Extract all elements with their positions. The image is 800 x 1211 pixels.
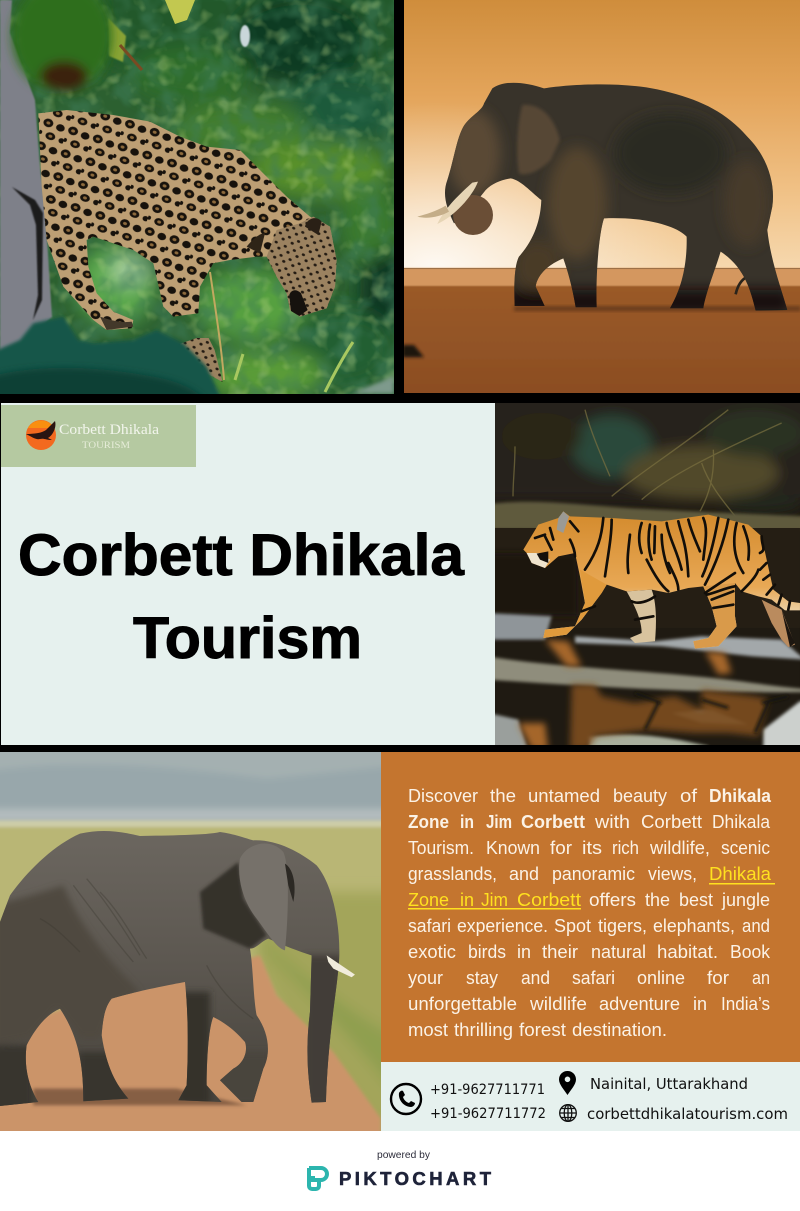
trunk disc: [453, 195, 493, 235]
description text: wildlife,: [649, 838, 710, 858]
grass background: [495, 403, 800, 510]
description text: stay: [466, 968, 498, 988]
rear leg colour: [693, 583, 737, 649]
description text: for: [550, 838, 572, 858]
description text: and: [742, 916, 770, 936]
elephant ear: [517, 105, 560, 174]
pale water reflections: [488, 613, 800, 753]
description text: Corbett: [521, 812, 585, 832]
description text: best: [679, 890, 713, 910]
logo badge: [1, 405, 196, 467]
description text: the: [490, 786, 516, 806]
leopard head: [267, 217, 337, 317]
photo: elephant on dirt road: [0, 752, 381, 1131]
description text: adventure: [599, 994, 680, 1014]
elephant ear: [239, 844, 288, 950]
hidden cub: [177, 338, 223, 382]
tiger reflection: [518, 640, 768, 750]
description text: and: [509, 864, 539, 884]
description text: unforgettable: [408, 994, 517, 1014]
landscape: [0, 762, 381, 810]
link text: Dhikala: [709, 864, 772, 884]
leopard body: [38, 110, 337, 382]
description text: beauty: [613, 786, 667, 806]
description text: Jim: [486, 812, 512, 832]
elephant silhouette: [437, 77, 791, 313]
leaves: [165, 0, 195, 24]
panel: title: [1, 403, 495, 745]
bank: [485, 502, 800, 531]
shadow line: [514, 306, 800, 311]
description text: forest: [519, 1020, 566, 1040]
description text: Zone: [408, 812, 449, 832]
description text: natural: [591, 942, 646, 962]
description text: offers: [589, 890, 636, 910]
link text: Jim: [481, 890, 508, 910]
description text: experience.: [457, 916, 548, 936]
description text: grasslands,: [408, 864, 497, 884]
description text: in: [460, 812, 474, 832]
phone numbers: [430, 1082, 546, 1122]
icon: piktochart logo: [309, 1168, 327, 1189]
description text: jungle: [721, 890, 770, 910]
icon: location pin: [559, 1071, 576, 1095]
description text: its: [582, 838, 602, 858]
location text: Nainital, Uttarakhand: [590, 1075, 748, 1093]
description text: their: [542, 942, 578, 962]
dark water: [495, 528, 800, 532]
description text: tigers,: [598, 916, 647, 936]
photo: tiger: [495, 403, 800, 745]
photo: leopard: [0, 0, 420, 410]
foreground bush: [0, 316, 221, 394]
description text: most: [408, 1020, 448, 1040]
link text: [408, 864, 775, 910]
description text: online: [637, 968, 685, 988]
tusks: [437, 182, 478, 224]
tail: [736, 277, 747, 294]
website text: corbettdhikalatourism.com: [587, 1105, 788, 1123]
tusk: [327, 955, 355, 977]
piktochart wordmark: PIKTOCHART: [339, 1168, 492, 1189]
description text: views,: [648, 864, 697, 884]
wrinkles: [40, 879, 253, 1019]
dirt road: [0, 955, 381, 1145]
tiger stripes: [535, 518, 790, 620]
description text: India’s: [721, 994, 770, 1014]
description text: [408, 786, 775, 1040]
description text: scenic: [721, 838, 770, 858]
description text: untamed: [528, 786, 600, 806]
description text: in: [517, 942, 531, 962]
small dark object: [402, 345, 424, 357]
icon: eagle: [26, 421, 55, 440]
description text: safari: [572, 968, 615, 988]
shoulder shade: [200, 862, 267, 949]
far legs: [762, 600, 795, 647]
description text: the: [645, 890, 670, 910]
foliage mottling: [0, 0, 394, 394]
heading: Corbett Dhikala: [18, 523, 465, 588]
blurred foreground leaf blob: [12, 0, 112, 92]
phone numbers: +91-9627711772: [430, 1106, 546, 1122]
heading: Tourism: [133, 606, 362, 671]
description text: exotic: [408, 942, 456, 962]
description text: birds: [468, 942, 506, 962]
description text: elephants,: [653, 916, 735, 936]
description text: habitat.: [657, 942, 718, 962]
tiger body: [523, 511, 800, 649]
description text: an: [752, 968, 770, 988]
description text: in: [693, 994, 707, 1014]
link text: Corbett: [517, 890, 581, 910]
description text: thrilling: [454, 1020, 513, 1040]
tail: [1, 909, 9, 989]
elephant shading: [0, 885, 342, 1112]
description text: and: [521, 968, 550, 988]
description text: Tourism.: [408, 838, 474, 858]
elephant body: [0, 825, 347, 1112]
footer: powered by Piktochart: [0, 1131, 800, 1211]
description text: Spot: [554, 916, 591, 936]
elephant shading: [447, 110, 791, 313]
link text: in: [460, 890, 474, 910]
icon: sun: [26, 420, 56, 450]
powered by: powered by: [377, 1149, 431, 1161]
description text: destination.: [572, 1020, 667, 1040]
description text: panoramic: [552, 864, 635, 884]
icon: phone: [391, 1084, 421, 1114]
description text: with: [594, 812, 630, 832]
elephant shadow: [33, 1089, 247, 1105]
description text: your: [408, 968, 443, 988]
tree trunk: [0, 0, 52, 353]
panel: description: [381, 752, 800, 1062]
tiger face: [527, 553, 550, 568]
grass strokes: [513, 410, 782, 518]
photo: elephant at sunset: [394, 0, 800, 403]
description text: Dhikala: [712, 812, 771, 832]
description text: for: [707, 968, 729, 988]
logo name: Corbett Dhikala: [59, 422, 160, 438]
description text: of: [680, 786, 698, 806]
description text: wildlife: [529, 994, 587, 1014]
description text: Discover: [408, 786, 478, 806]
icon: globe: [560, 1105, 576, 1121]
description text: Book: [730, 942, 771, 962]
description text: safari: [408, 916, 451, 936]
link text: Zone: [408, 890, 449, 910]
description text: Known: [486, 838, 540, 858]
description text: Dhikala: [709, 786, 772, 806]
front leg colour: [543, 570, 607, 638]
plant stalks: [210, 272, 224, 380]
logo badge: TOURISM: [82, 441, 131, 451]
description text: rich: [612, 838, 639, 858]
light corner: [350, 376, 394, 394]
panel: contact bar: [381, 1062, 800, 1131]
phone numbers: +91-9627711771: [430, 1082, 545, 1098]
heading: [18, 523, 465, 671]
description text: Corbett: [641, 812, 702, 832]
